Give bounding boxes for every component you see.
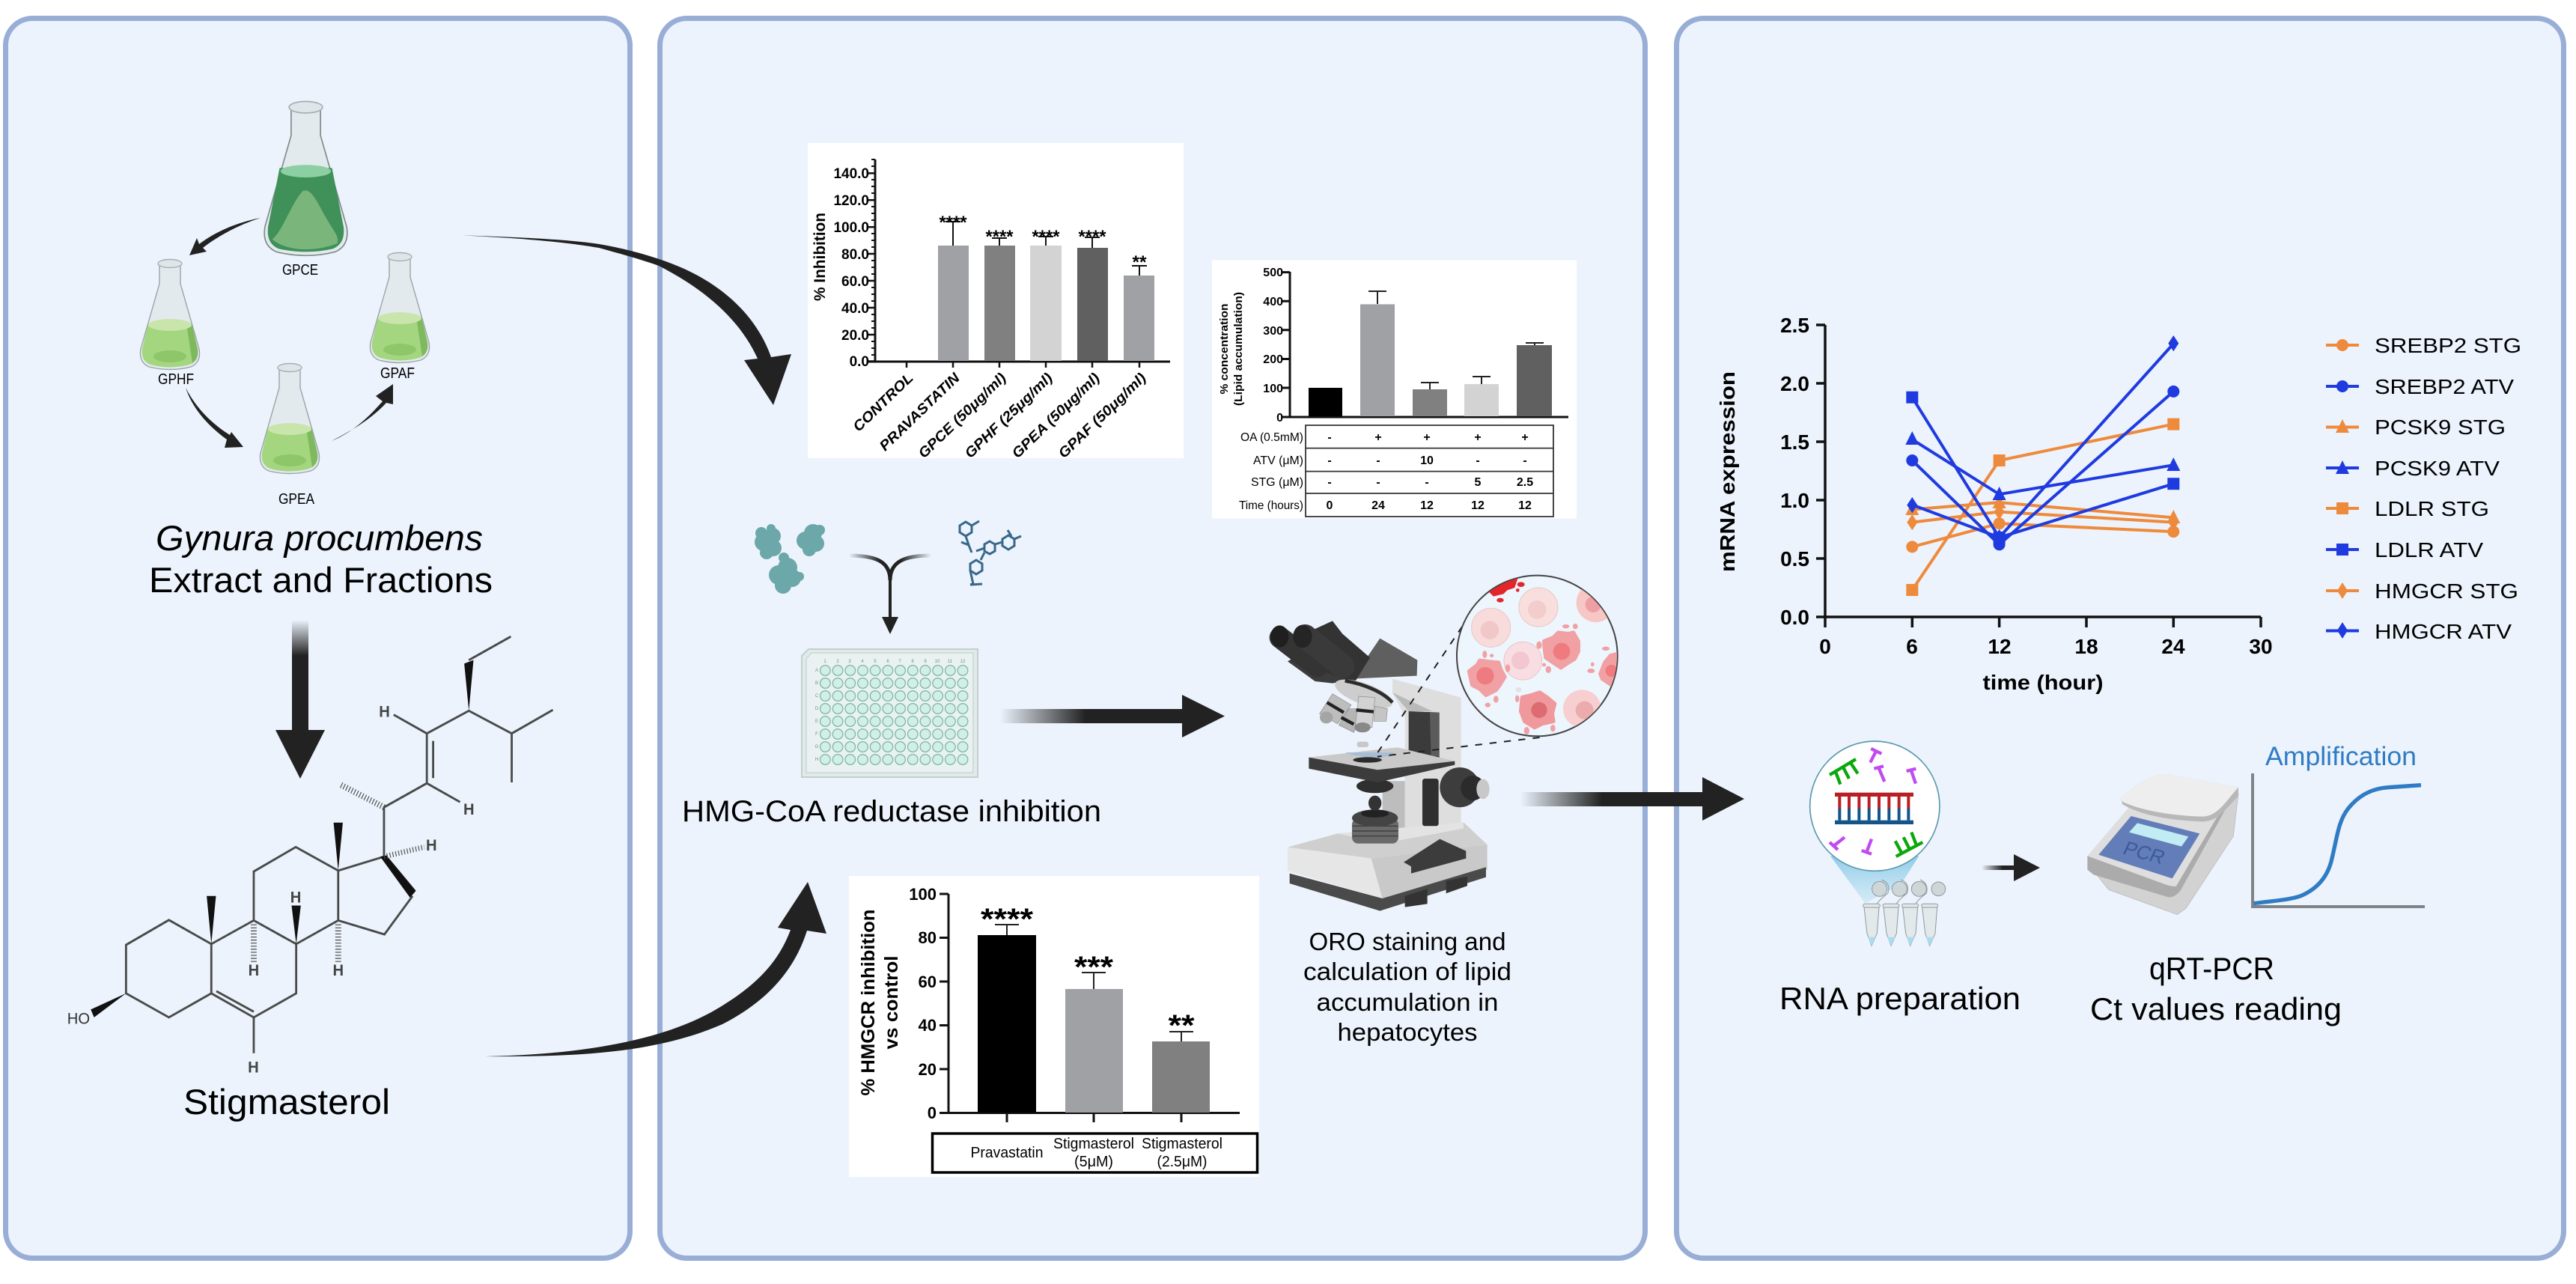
icon: 96-well plate: 4 (861, 660, 864, 664)
y tick labels: 40.0 (841, 301, 869, 317)
icon: 96-well plate: 12 (960, 660, 966, 664)
icon: 96-well plate: 11 (948, 660, 953, 664)
icon: GPCE flask (264, 102, 347, 255)
subtitle: extract and fractions: Extract and Fractions (149, 560, 493, 600)
icon: 96-well plate: 7 (898, 660, 901, 664)
treatment table: OA (0.5mM) (1240, 431, 1303, 444)
y axis title: % Inhibition (812, 213, 829, 301)
icon: 96-well plate: 9 (924, 660, 927, 664)
icon: RNA and tubes (1810, 741, 1946, 946)
x category labels: PRAVASTATIN (877, 370, 963, 454)
significance stars: **** (985, 227, 1014, 247)
axes (1282, 272, 1568, 418)
x tick labels: 0 (1819, 635, 1831, 658)
treatment table: + (1474, 431, 1482, 444)
dashed zoom lines (1375, 627, 1540, 757)
icon: PCR machine: PCR (2119, 837, 2169, 868)
icon: 96-well plate: A (815, 669, 818, 673)
significance stars: **** (1078, 227, 1106, 247)
treatment table: - (1327, 431, 1332, 444)
label: ORO staining: accumulation in (1316, 988, 1499, 1016)
y tick labels (1780, 314, 1809, 629)
significance stars (939, 213, 1147, 273)
arrow: GPCE to GPHF (189, 218, 261, 255)
axes (940, 894, 1240, 1122)
y tick labels: 20 (919, 1060, 937, 1079)
bar chart: HMGCR inhibition (849, 876, 1259, 1177)
icon: 96-well plate: 1 (823, 660, 826, 664)
treatment table: - (1376, 454, 1380, 467)
icon: PCR machine (2087, 774, 2238, 915)
significance stars: **** (939, 213, 967, 233)
axis title x: time (hour) (1982, 671, 2104, 694)
treatment table: + (1521, 431, 1529, 444)
y tick labels: 80 (919, 928, 937, 947)
legend: LDLR STG (2375, 497, 2489, 520)
icon: GPAF flask (370, 253, 430, 362)
arrow: extract to stigmasterol (275, 620, 325, 779)
chemical structure: stigmasterol: H (379, 703, 390, 721)
treatment table: 12 (1420, 499, 1434, 512)
x tick labels: 12 (1988, 635, 2012, 658)
label: GPAF: GPAF (380, 365, 415, 382)
treatment table: 10 (1420, 454, 1434, 467)
treatment table: - (1376, 476, 1380, 489)
y axis title: % concentration (1218, 303, 1231, 395)
legend: HMGCR ATV (2375, 620, 2512, 643)
category table: Stigmasterol (1142, 1136, 1222, 1152)
legend: SREBP2 ATV (2375, 375, 2514, 398)
x category labels: GPAF (50μg/ml) (1056, 370, 1149, 462)
panel: gene expression (1677, 18, 2563, 1258)
arrow: merge into plate (849, 556, 931, 634)
y tick labels: 120.0 (833, 193, 869, 209)
y tick labels: 0 (928, 1104, 937, 1122)
icon: 96-well plate: 2 (836, 660, 839, 664)
category table: (2.5μM) (1157, 1154, 1207, 1170)
chemical structure: stigmasterol: HO (67, 1010, 90, 1028)
treatment table: Time (hours) (1239, 499, 1303, 512)
chemical structure: stigmasterol: H (463, 801, 475, 818)
legend: PCSK9 STG (2375, 416, 2506, 439)
icon: enzymes (755, 524, 825, 594)
significance stars: **** (1032, 227, 1060, 247)
icon: 96-well plate: C (815, 694, 819, 699)
y tick labels: 100 (909, 885, 937, 904)
label: ORO staining: ORO staining and (1309, 928, 1506, 955)
chemical structure: stigmasterol: H (332, 962, 344, 979)
y tick labels: 0 (1276, 412, 1283, 425)
icon: 96-well plate: 6 (886, 660, 889, 664)
chemical structure: stigmasterol: H (426, 837, 437, 854)
bars (1309, 291, 1552, 416)
y tick labels: 500 (1263, 267, 1283, 279)
y tick labels: 2.5 (1780, 314, 1809, 337)
icon: 96-well plate: G (815, 745, 819, 749)
bar chart with table: lipid accumulation (1212, 261, 1577, 518)
treatment table: 24 (1371, 499, 1385, 512)
y tick labels: 200 (1263, 353, 1283, 366)
x category labels: CONTROL (850, 370, 916, 435)
y tick labels: 0.0 (1780, 606, 1809, 629)
panel: assays (660, 18, 1645, 1258)
arrow: plate to microscope (1000, 695, 1225, 737)
treatment table: - (1327, 454, 1332, 467)
x category labels: GPCE (50μg/ml) (916, 370, 1009, 462)
legend: LDLR ATV (2375, 538, 2483, 562)
x tick labels: 6 (1906, 635, 1918, 658)
category table: Stigmasterol (1053, 1136, 1134, 1152)
icon: GPHF flask (140, 259, 200, 370)
series markers (1905, 419, 2180, 596)
icon: 96-well plate: D (815, 707, 819, 711)
label: Amplification: Amplification (2265, 742, 2417, 771)
treatment table: 12 (1518, 499, 1532, 512)
title: Gynura procumbens: Gynura procumbens (156, 518, 483, 558)
y tick labels: 400 (1263, 296, 1283, 308)
x tick labels: 30 (2249, 635, 2273, 658)
label: qRT-PCR: qRT-PCR (2149, 951, 2274, 986)
significance stars: ** (1168, 1009, 1195, 1042)
icon: 96-well plate: H (815, 758, 818, 762)
icon: hepatocytes magnified (1457, 576, 1619, 736)
y tick labels: 0.5 (1780, 547, 1809, 571)
treatment table: - (1327, 476, 1332, 489)
icon: 96-well plate: E (815, 719, 818, 724)
legend: HMGCR STG (2375, 579, 2518, 603)
treatment table: - (1425, 476, 1429, 489)
significance stars: *** (1074, 951, 1113, 984)
treatment table: 0 (1327, 499, 1333, 512)
treatment table: STG (μM) (1251, 476, 1303, 489)
treatment table: + (1374, 431, 1382, 444)
significance stars: **** (981, 903, 1033, 936)
y axis title line 2: (Lipid accumulation) (1232, 292, 1245, 406)
treatment table: ATV (μM) (1253, 454, 1303, 467)
PCR tubes (1863, 880, 1946, 946)
category table: (5μM) (1074, 1154, 1113, 1170)
x category labels (850, 370, 1149, 462)
treatment table: 12 (1471, 499, 1485, 512)
arrow: RNA to qPCR (1982, 854, 2040, 881)
label: ORO staining: hepatocytes (1337, 1018, 1478, 1046)
x tick labels: 18 (2074, 635, 2098, 658)
icon: 96-well plate: B (815, 681, 818, 686)
bars (938, 222, 1154, 361)
bars (978, 925, 1210, 1113)
arrow: extract to inhibition chart (456, 235, 791, 405)
chart: amplification curve (2253, 742, 2425, 907)
x category labels: GPHF (25μg/ml) (962, 370, 1056, 462)
label: ORO staining: calculation of lipid (1303, 958, 1511, 985)
chemical structure: stigmasterol (67, 636, 553, 1077)
chemical structure: stigmasterol: H (248, 1059, 259, 1077)
icon: 96-well plate: 8 (911, 660, 914, 664)
label: RNA preparation: RNA preparation (1779, 981, 2021, 1016)
treatment table: - (1523, 454, 1527, 467)
icon: 96-well plate: F (815, 732, 818, 737)
y tick labels: 60.0 (841, 274, 869, 290)
y tick labels (1263, 267, 1283, 425)
icon: 96-well plate: 5 (874, 660, 877, 664)
y tick labels: 100.0 (833, 220, 869, 236)
y tick labels: 140.0 (833, 166, 869, 182)
axis lines (867, 159, 1170, 362)
treatment table: 2.5 (1517, 476, 1533, 489)
significance stars: ** (1132, 252, 1147, 273)
y tick labels: 1.0 (1780, 489, 1809, 512)
y tick labels: 40 (919, 1016, 937, 1035)
chemical structure: stigmasterol: H (249, 962, 259, 979)
significance stars (981, 903, 1195, 1042)
y tick labels: 20.0 (841, 328, 869, 344)
icon: GPEA flask (260, 364, 320, 473)
axis title y: mRNA expression (1716, 371, 1739, 572)
category table: Pravastatin (970, 1145, 1044, 1161)
y axis title line 2: vs control (881, 955, 902, 1050)
DNA hybrid (1835, 793, 1913, 824)
label: GPCE: GPCE (282, 262, 318, 279)
y tick labels: 60 (919, 973, 937, 991)
y tick labels (833, 166, 869, 370)
series lines (1912, 344, 2173, 590)
y tick labels: 100 (1263, 383, 1283, 395)
arrow: GPHF to GPEA (186, 388, 243, 448)
legend: SREBP2 STG (2375, 334, 2521, 357)
icon: 96-well plate: 3 (848, 660, 851, 664)
bar chart: percent inhibition (808, 143, 1184, 462)
label: HMG-CoA reductase inhibition: HMG-CoA reductase inhibition (682, 795, 1101, 828)
icon: 96-well plate (802, 649, 978, 777)
label: GPHF: GPHF (158, 371, 194, 388)
y tick labels (909, 885, 937, 1122)
y tick labels: 2.0 (1780, 372, 1809, 395)
treatment table (1239, 425, 1553, 517)
y tick labels: 300 (1263, 325, 1283, 338)
label: Stigmasterol: Stigmasterol (183, 1082, 390, 1122)
label: Ct values reading: Ct values reading (2090, 991, 2342, 1026)
icon: 96-well plate: 10 (935, 660, 940, 664)
panel: extract and stigmasterol (6, 18, 630, 1258)
treatment table: - (1476, 454, 1480, 467)
axes (1816, 325, 2261, 627)
arrow: GPEA to GPAF (332, 384, 393, 441)
label: ORO staining (1303, 928, 1511, 1046)
treatment table: 5 (1475, 476, 1482, 489)
label: GPEA: GPEA (278, 491, 315, 508)
y tick labels: 1.5 (1780, 430, 1809, 454)
x category labels: GPEA (50μg/ml) (1009, 370, 1103, 462)
chemical structure: stigmasterol: H (290, 889, 301, 907)
y axis title: % HMGCR inhibition (858, 909, 879, 1096)
x tick labels: 24 (2161, 635, 2185, 658)
treatment table: + (1423, 431, 1431, 444)
legend: PCSK9 ATV (2375, 457, 2500, 480)
category table (933, 1134, 1258, 1172)
x tick labels (1819, 635, 2273, 658)
icon: microscope (1270, 621, 1540, 911)
arrow: microscope to RNA (1520, 777, 1744, 821)
y tick labels: 0.0 (850, 354, 869, 370)
y tick labels: 80.0 (841, 247, 869, 263)
legend (2326, 334, 2521, 643)
icon: statin compounds (960, 521, 1021, 585)
line chart: mRNA expression (1716, 314, 2273, 694)
arrow: stigmasterol to HMGCR chart (485, 882, 826, 1056)
